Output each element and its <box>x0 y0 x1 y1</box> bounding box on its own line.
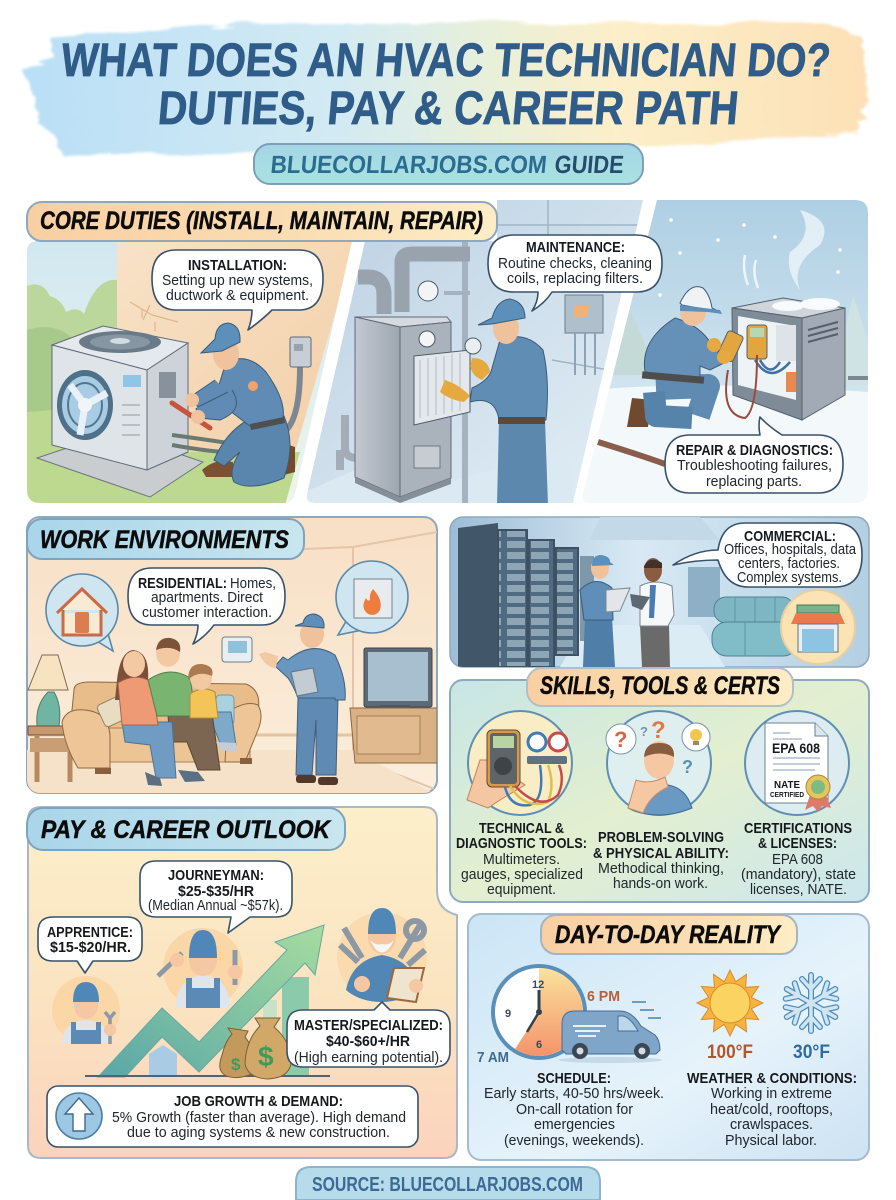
arrow: rising career path <box>98 925 324 1077</box>
icon: lamp and side table <box>28 655 77 782</box>
icon: thinking technician <box>606 711 711 815</box>
skill: problem solving: Methodical thinking, <box>598 860 724 877</box>
heading: day-to-day: DAY-TO-DAY REALITY <box>555 921 782 949</box>
heading: work environments <box>27 519 304 559</box>
subtitle pill: GUIDE <box>553 151 625 179</box>
title banner brush stroke <box>22 22 868 156</box>
icon: certificate: CERTIFIED <box>770 792 804 799</box>
callout: apprentice: $15-$20/HR. <box>50 939 131 956</box>
callout: residential: Homes, <box>230 575 276 592</box>
icon: money bags <box>220 1018 291 1079</box>
text: schedule: emergencies <box>534 1116 615 1133</box>
callout: job growth and demand: due to aging systems & new construction. <box>127 1124 390 1141</box>
icon: clock: 6 <box>536 1039 542 1051</box>
heading: day-to-day <box>541 915 797 954</box>
heading: pay and career outlook: PAY & CAREER OUTLOOK <box>41 816 332 844</box>
title <box>59 33 833 134</box>
callout: residential: apartments. Direct <box>151 589 264 606</box>
icon: wall switch box <box>284 337 311 432</box>
icon: thinking technician: ? <box>614 727 627 752</box>
skill: problem solving: hands-on work. <box>613 875 708 892</box>
master technician figure <box>337 908 427 1002</box>
technician with filter <box>440 299 548 505</box>
callout: maintenance: coils, replacing filters. <box>507 270 643 287</box>
server racks <box>458 523 594 667</box>
icon: sofa <box>62 682 261 774</box>
heading: work environments: WORK ENVIRONMENTS <box>40 526 289 554</box>
callout: commercial: Offices, hospitals, data <box>724 541 857 558</box>
heading: core duties: CORE DUTIES (INSTALL, MAINTAIN, REPAIR) <box>40 207 483 235</box>
icon: multimeter and gauges <box>467 711 572 815</box>
heading: skills: SKILLS, TOOLS & CERTS <box>540 672 780 700</box>
icon: money bags: $ <box>231 1055 241 1074</box>
icon: service van <box>558 1002 662 1063</box>
heading: core duties <box>27 202 497 241</box>
skill: certifications <box>741 711 856 898</box>
technician installing <box>172 323 295 486</box>
callout: commercial: Complex systems. <box>737 569 842 586</box>
icon: clock: 9 <box>505 1008 511 1020</box>
skill: certifications: & LICENSES: <box>758 835 837 852</box>
skill: certifications: CERTIFICATIONS <box>744 820 852 837</box>
callout: repair and diagnostics: replacing parts. <box>706 473 802 490</box>
callout: master specialized: $40-$60+/HR <box>326 1033 410 1050</box>
panel: pay and career outlook <box>27 807 457 1158</box>
journeyman figure <box>158 928 243 1008</box>
callout: commercial: COMMERCIAL: <box>744 528 836 545</box>
callout: master specialized: (High earning potential). <box>294 1049 443 1066</box>
callout: journeyman: $25-$35/HR <box>178 883 254 900</box>
icon: certificate <box>745 711 849 815</box>
source footer: SOURCE: BLUECOLLARJOBS.COM <box>312 1174 583 1196</box>
icon: thermostat <box>222 637 252 662</box>
skill: technical tools <box>456 711 587 898</box>
skill: technical tools: gauges, specialized <box>461 866 583 883</box>
text: schedule: Early starts, 40-50 hrs/week. <box>484 1085 664 1102</box>
technician presenting <box>259 614 345 785</box>
air conditioner unit <box>52 326 188 470</box>
label: 7 AM: 7 AM <box>477 1049 509 1066</box>
callout: installation: INSTALLATION: <box>188 257 287 274</box>
callout: maintenance <box>488 235 662 311</box>
callout: repair and diagnostics: REPAIR & DIAGNOSTICS: <box>676 442 833 459</box>
label: 6 PM: 6 PM <box>587 988 620 1005</box>
callout: residential <box>128 568 285 644</box>
callout: repair and diagnostics: Troubleshooting failures, <box>677 457 832 474</box>
concrete pad <box>36 448 204 498</box>
skill: technical tools: TECHNICAL & <box>479 820 564 837</box>
icon: certificate: EPA 608 <box>772 740 820 756</box>
callout: job growth and demand: 5% Growth (faster than average). High demand <box>112 1109 406 1126</box>
text: weather and conditions: heat/cold, rooftops, <box>710 1101 833 1118</box>
callout: master specialized: MASTER/SPECIALIZED: <box>294 1017 443 1034</box>
icon bubble: house <box>46 574 118 651</box>
icon: sun <box>697 970 763 1036</box>
panel: core duties <box>27 200 875 505</box>
subtitle pill <box>254 144 643 184</box>
callout: installation: ductwork & equipment. <box>166 287 309 304</box>
callout: installation: Setting up new systems, <box>162 272 313 289</box>
technician and manager <box>580 555 674 667</box>
text: weather and conditions: crawlspaces. <box>730 1116 813 1133</box>
skill: problem solving: & PHYSICAL ABILITY: <box>593 845 729 862</box>
callout: commercial: centers, factories. <box>738 555 840 572</box>
callout: apprentice: APPRENTICE: <box>47 924 133 941</box>
icon: thinking technician: ? <box>682 757 693 777</box>
text: schedule <box>484 1070 664 1149</box>
skill: problem solving <box>593 711 729 892</box>
icon: up arrow <box>56 1093 102 1139</box>
callout: repair and diagnostics <box>665 417 843 493</box>
icon: certificate: NATE <box>774 780 800 791</box>
icon bubble: furnace flame <box>336 561 408 635</box>
callout: residential: RESIDENTIAL: <box>138 575 227 592</box>
panel: skills, tools and certs <box>450 668 869 902</box>
callout: residential: customer interaction. <box>142 604 272 621</box>
text: schedule: SCHEDULE: <box>537 1070 611 1087</box>
icon: television and cabinet <box>350 648 437 763</box>
chiller tanks <box>712 597 798 656</box>
icon: thinking technician: ? <box>640 724 648 739</box>
baseline <box>85 1075 330 1077</box>
label: 30 degrees: 30°F <box>793 1042 830 1063</box>
skill: certifications: licenses, NATE. <box>750 881 847 898</box>
skill: certifications: (mandatory), state <box>741 866 856 883</box>
skill: technical tools: DIAGNOSTIC TOOLS: <box>456 835 587 852</box>
callout: journeyman <box>140 861 292 933</box>
text: weather and conditions: Physical labor. <box>725 1132 817 1149</box>
panel: day-to-day reality <box>468 914 869 1160</box>
icon: money bags: $ <box>258 1041 274 1072</box>
title: DUTIES, PAY & CAREER PATH <box>156 81 741 134</box>
callout: apprentice <box>38 917 142 973</box>
furnace pipes <box>340 254 470 470</box>
icon: storefront badge <box>781 590 855 664</box>
callout: maintenance: MAINTENANCE: <box>526 239 625 256</box>
callout: journeyman: JOURNEYMAN: <box>168 867 264 884</box>
apprentice figure <box>52 976 120 1044</box>
air filter <box>414 350 470 425</box>
callout: master specialized <box>287 1002 450 1067</box>
text: weather and conditions: Working in extreme <box>711 1085 832 1102</box>
source footer <box>296 1167 600 1200</box>
family on sofa <box>115 638 237 786</box>
icon: thinking technician: ? <box>651 717 666 744</box>
outdoor unit open <box>732 298 868 420</box>
skill: technical tools: Multimeters. <box>483 851 560 868</box>
icon: snowflake <box>782 975 840 1031</box>
heading: skills <box>527 668 793 706</box>
text: schedule: (evenings, weekends). <box>504 1132 644 1149</box>
scene: repair and diagnostics <box>575 200 875 505</box>
text: schedule: On-call rotation for <box>516 1101 633 1118</box>
callout: journeyman: (Median Annual ~$57k). <box>148 897 283 914</box>
skill: problem solving: PROBLEM-SOLVING <box>598 829 724 846</box>
skill: certifications: EPA 608 <box>772 851 823 868</box>
furnace <box>355 281 451 503</box>
text: weather and conditions: WEATHER & CONDITIONS: <box>687 1070 857 1087</box>
bar chart and house behind arrow <box>149 977 309 1076</box>
icon: clock: 12 <box>532 979 544 991</box>
text: weather and conditions <box>687 1070 857 1149</box>
callout: job growth and demand: JOB GROWTH & DEMAND: <box>174 1093 343 1110</box>
label: 100 degrees: 100°F <box>707 1042 753 1063</box>
callout: installation <box>152 250 323 330</box>
callout: commercial <box>673 523 862 587</box>
electrical box <box>565 295 603 375</box>
panel: work environments <box>27 517 437 795</box>
heading: pay and career outlook <box>27 808 345 850</box>
skill: technical tools: equipment. <box>487 881 556 898</box>
icon: clock <box>493 966 585 1058</box>
callout: maintenance: Routine checks, cleaning <box>498 255 652 272</box>
panel: commercial <box>450 517 869 667</box>
callout: job growth and demand <box>47 1086 418 1147</box>
scene: maintenance <box>300 200 650 505</box>
subtitle pill: BLUECOLLARJOBS.COM <box>269 151 548 179</box>
technician in snow <box>627 287 744 427</box>
scene: installation <box>27 241 352 503</box>
